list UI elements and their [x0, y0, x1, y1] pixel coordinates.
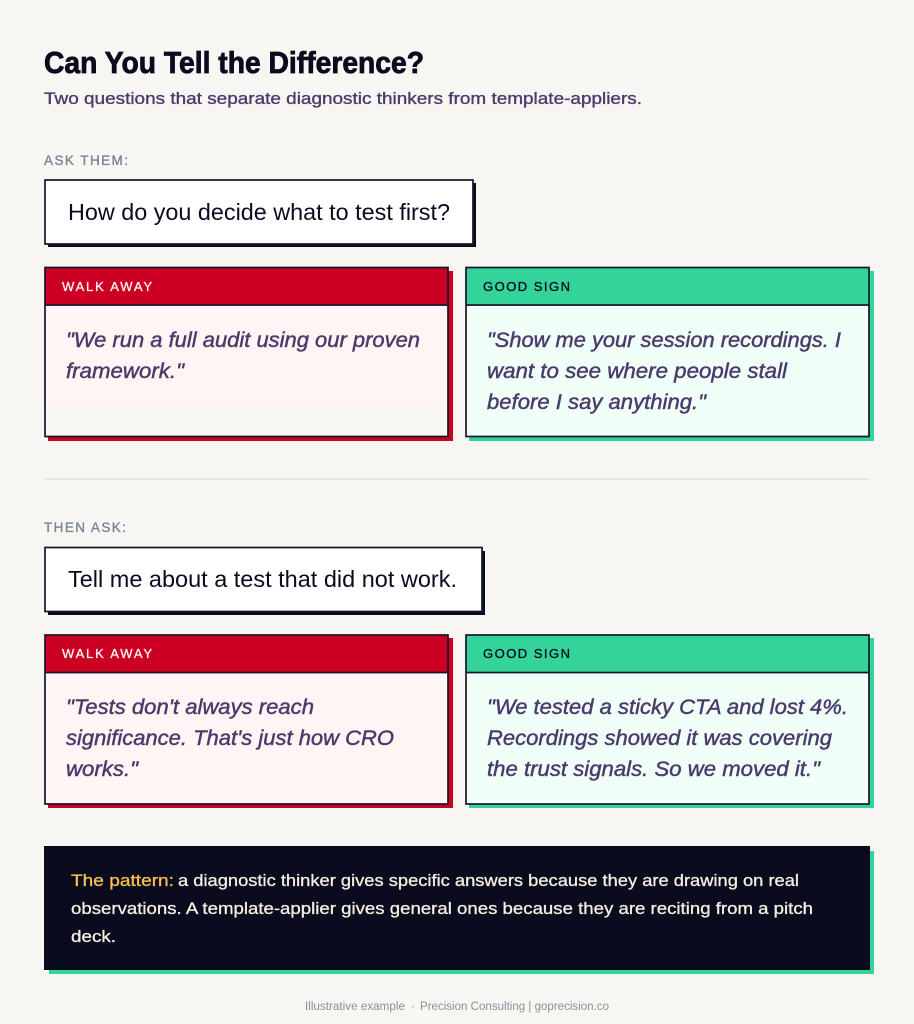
- panel: good sign, question 2: [466, 635, 874, 808]
- footer: Illustrative example: [305, 1001, 405, 1013]
- quote: Recordings showed it was covering: [487, 727, 832, 750]
- header: good sign: GOOD SIGN: [483, 279, 570, 294]
- callout text: deck.: [71, 928, 116, 946]
- quote: [487, 329, 841, 414]
- quote: significance. That's just how CRO: [66, 727, 394, 750]
- footer: [305, 1001, 609, 1013]
- quote: want to see where people stall: [487, 360, 788, 383]
- question box 2: [45, 548, 485, 615]
- header: good sign: GOOD SIGN: [483, 646, 570, 661]
- quote: [66, 696, 394, 781]
- header: walk away: [45, 268, 448, 305]
- quote: works.": [66, 758, 140, 781]
- footer: ·: [411, 1001, 415, 1013]
- panel: walk away, question 2: [45, 635, 453, 808]
- quote: [487, 696, 848, 781]
- callout: the pattern: [44, 846, 874, 974]
- callout text: observations. A template-applier gives general ones because they are reciting from a pitch: [71, 900, 813, 918]
- quote: "We tested a sticky CTA and lost 4%.: [487, 696, 848, 719]
- subtitle: Two questions that separate diagnostic thinkers from template-appliers.: [44, 90, 642, 108]
- quote: [66, 329, 420, 383]
- quote: "Tests don't always reach: [66, 696, 314, 719]
- quote: before I say anything.": [487, 391, 708, 414]
- header: walk away: WALK AWAY: [62, 279, 152, 294]
- quote: the trust signals. So we moved it.": [487, 758, 822, 781]
- question box 2: Tell me about a test that did not work.: [68, 566, 457, 592]
- callout text: a diagnostic thinker gives specific answers because they are drawing on real: [178, 872, 799, 890]
- header: good sign: [466, 635, 869, 672]
- callout text: The pattern:: [71, 872, 174, 890]
- callout text: [71, 872, 813, 946]
- label: ask them: ASK THEM:: [44, 153, 128, 168]
- header: walk away: WALK AWAY: [62, 646, 152, 661]
- quote: "Show me your session recordings. I: [487, 329, 841, 352]
- quote: framework.": [66, 360, 186, 383]
- panel: good sign, question 1: [466, 268, 874, 441]
- footer: Precision Consulting | goprecision.co: [420, 1001, 609, 1013]
- header: good sign: [466, 268, 869, 305]
- label: then ask: THEN ASK:: [44, 520, 126, 535]
- panel: walk away, question 1: [45, 268, 453, 441]
- question box 1: How do you decide what to test first?: [68, 199, 450, 225]
- quote: "We run a full audit using our proven: [66, 329, 420, 352]
- question box 1: [45, 180, 476, 247]
- header: walk away: [45, 635, 448, 672]
- title: Can You Tell the Difference?: [44, 45, 424, 80]
